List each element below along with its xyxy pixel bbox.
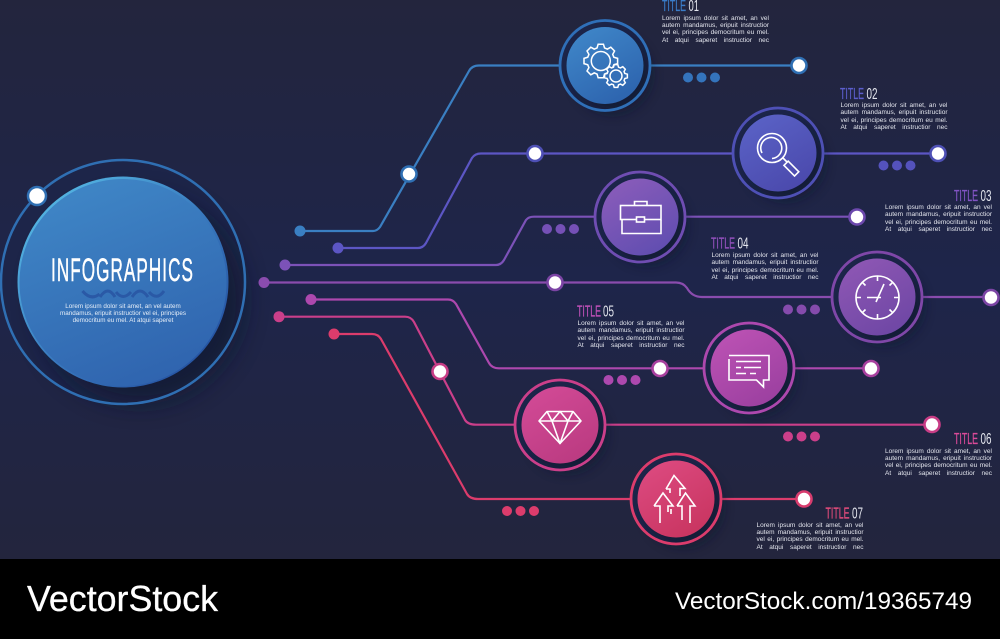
text block 02: At atqui saperet instructior nec: [840, 124, 948, 131]
text block 03: Lorem ipsum dolor sit amet, an vel: [885, 204, 992, 211]
node 3: briefcase: [595, 172, 686, 264]
text block 01: vel ei, principes democritum eu mel.: [662, 29, 769, 36]
text block 01: At atqui saperet instructior nec: [662, 37, 769, 44]
line end markers: [402, 58, 998, 506]
node 5: chat: [704, 323, 795, 415]
text block 07: At atqui saperet instructior nec: [756, 544, 864, 551]
ring marker dot: [28, 187, 46, 205]
connector 1: [300, 66, 799, 231]
three dots 1: [683, 72, 720, 82]
connector 6: [279, 317, 932, 425]
text block 04: [712, 252, 818, 281]
icon: gears: [584, 44, 627, 87]
icon: growth arrows: [654, 476, 695, 523]
node 1: gears: [560, 20, 651, 113]
text block 02: vel ei, principes democritum eu mel.: [840, 117, 948, 124]
node 6: diamond: [515, 380, 606, 472]
heading: infographics: INFOGRAPHICS: [51, 252, 194, 288]
title 06: 06: [980, 431, 992, 448]
title 07: TITLE: [826, 506, 850, 522]
text block 01: [662, 14, 769, 44]
text block 07: Lorem ipsum dolor sit amet, an vel: [756, 522, 864, 528]
three dots 7: [502, 506, 539, 516]
title 05: 05: [603, 304, 614, 320]
text block 04: At atqui saperet instructior nec: [712, 274, 818, 281]
text block 05: [578, 320, 684, 349]
text block 05: vel ei, principes democritum eu mel.: [578, 335, 684, 342]
title 04: TITLE: [711, 236, 735, 252]
connector 7: [334, 334, 804, 499]
text block 06: At atqui saperet instructior nec: [885, 470, 992, 477]
connector 3: [285, 217, 857, 265]
central circle: [1, 160, 245, 404]
text block 05: At atqui saperet instructior nec: [578, 342, 684, 349]
title 04: 04: [738, 236, 749, 252]
three dots 6: [783, 432, 820, 442]
text block 04: autem mandamus, eripuit instructior: [712, 259, 818, 266]
node 4: clock: [832, 252, 923, 344]
node 7: arrows: [631, 454, 722, 546]
central circle text: democritum eu mel. At atqui saperet: [73, 317, 173, 324]
title 03: TITLE: [954, 188, 978, 205]
title 03: 03: [980, 188, 992, 205]
icon: diamond: [539, 412, 581, 444]
node 2: magnifier: [733, 108, 824, 200]
central circle text: Lorem ipsum dolor sit amet, an vel autem: [65, 303, 181, 310]
title 02: TITLE: [840, 86, 864, 103]
text block 03: vel ei, principes democritum eu mel.: [885, 219, 992, 226]
text block 01: autem mandamus, eripuit instructior: [662, 22, 769, 29]
text block 02: autem mandamus, eripuit instructior: [840, 109, 948, 116]
text block 06: autem mandamus, eripuit instructior: [885, 455, 992, 462]
text block 02: Lorem ipsum dolor sit amet, an vel: [840, 102, 948, 109]
footer id: VectorStock.com/19365749: [675, 588, 972, 615]
three dots 4: [783, 304, 820, 314]
text block 03: At atqui saperet instructior nec: [885, 226, 992, 233]
text block 01: Lorem ipsum dolor sit amet, an vel: [662, 14, 769, 22]
text block 07: vel ei, principes democritum eu mel.: [756, 536, 864, 543]
text block 03: [885, 204, 992, 233]
connector 5: [311, 300, 871, 368]
text block 07: [756, 522, 864, 551]
footer logo: VectorStock: [27, 578, 219, 619]
text block 05: Lorem ipsum dolor sit amet, an vel: [578, 320, 684, 327]
icon: magnifier: [758, 134, 799, 176]
icon: chat bubble: [729, 356, 769, 387]
icon: clock: [856, 276, 899, 319]
text block 04: Lorem ipsum dolor sit amet, an vel: [712, 252, 818, 259]
text block 06: [885, 448, 992, 477]
wave ornament: [82, 291, 164, 297]
three dots 3: [542, 224, 579, 234]
icon: briefcase: [620, 202, 661, 234]
title 07: 07: [852, 506, 863, 522]
text block 07: autem mandamus, eripuit instructior: [756, 529, 864, 536]
three dots 2: [878, 160, 916, 170]
line start dots: [258, 226, 344, 340]
text block 06: vel ei, principes democritum eu mel.: [885, 462, 992, 469]
title 02: 02: [866, 86, 878, 103]
text block 04: vel ei, principes democritum eu mel.: [712, 267, 818, 274]
central circle text: mandamus, eripuit instructior vel ei, principes: [60, 310, 186, 317]
footer bar: [0, 559, 1000, 639]
text block 03: autem mandamus, eripuit instructior: [885, 211, 992, 218]
connector 4: [264, 282, 991, 297]
three dots 5: [604, 375, 640, 385]
text block 02: [840, 102, 948, 131]
connector 2: [338, 154, 938, 248]
title 05: TITLE: [577, 304, 601, 320]
text block 06: Lorem ipsum dolor sit amet, an vel: [885, 448, 992, 454]
central circle text: [60, 303, 186, 324]
text block 05: autem mandamus, eripuit instructior: [578, 327, 684, 334]
title 06: TITLE: [954, 431, 978, 448]
